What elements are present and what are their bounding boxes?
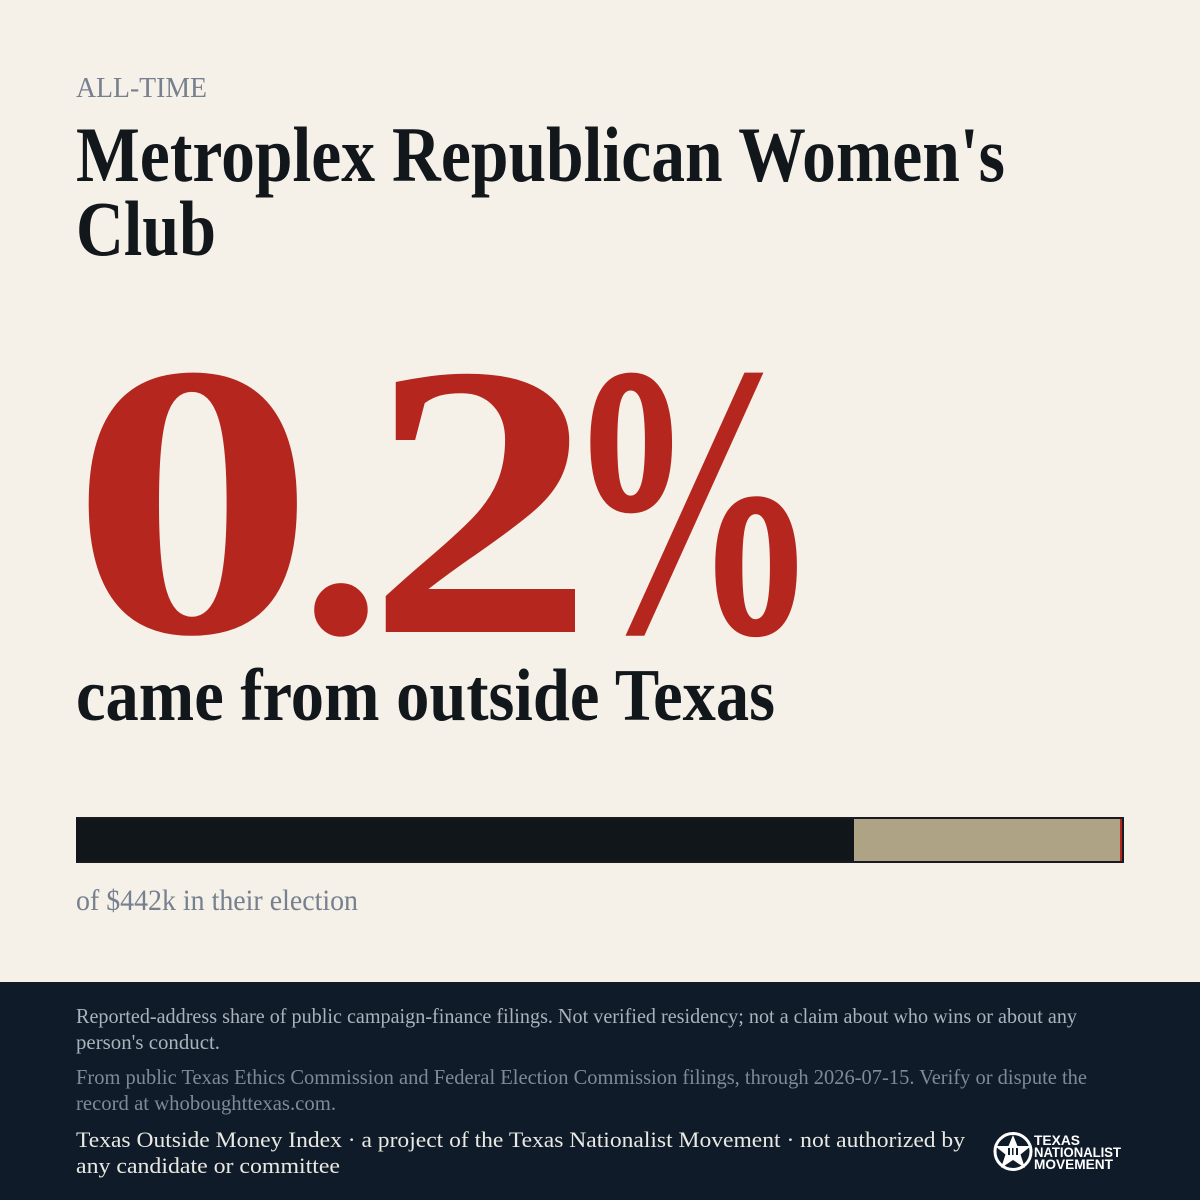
title: [76, 111, 1005, 272]
bar caption: of $442k in their election: [76, 884, 358, 917]
logo wordmark: [1034, 1133, 1122, 1172]
stacked bar: [76, 817, 1124, 863]
attribution: [76, 1127, 965, 1178]
logo: Texas Nationalist Movement: [995, 1133, 1122, 1172]
big percentage: [70, 285, 821, 717]
big percentage: 2: [367, 285, 595, 717]
subheading: came from outside Texas: [76, 655, 775, 737]
eyebrow label: ALL-TIME: [76, 72, 207, 104]
footer panel: [0, 982, 1200, 1200]
logo wordmark: NATIONALIST: [1034, 1145, 1122, 1160]
big percentage: 0: [70, 285, 316, 717]
attribution: Texas Outside Money Index · a project of the Texas Nationalist Movement · not authorized by: [76, 1127, 965, 1152]
disclaimer: Reported-address share of public campaign-finance filings. Not verified residency; not a claim about who wins or about any: [76, 1004, 1077, 1028]
source note: From public Texas Ethics Commission and Federal Election Commission filings, through 2026-07-15. Verify or dispute the: [76, 1065, 1087, 1089]
big percentage: %: [564, 285, 821, 717]
big percentage: .: [300, 339, 382, 704]
disclaimer: [76, 1004, 1077, 1054]
logo wordmark: TEXAS: [1034, 1133, 1080, 1148]
title: Club: [76, 185, 216, 272]
source note: [76, 1065, 1087, 1115]
source note: record at whoboughttexas.com.: [76, 1091, 336, 1115]
icon: star in circle: [995, 1134, 1031, 1170]
title: Metroplex Republican Women's: [76, 111, 1005, 198]
logo wordmark: MOVEMENT: [1034, 1157, 1114, 1172]
attribution: any candidate or committee: [76, 1153, 340, 1178]
disclaimer: person's conduct.: [76, 1030, 220, 1054]
